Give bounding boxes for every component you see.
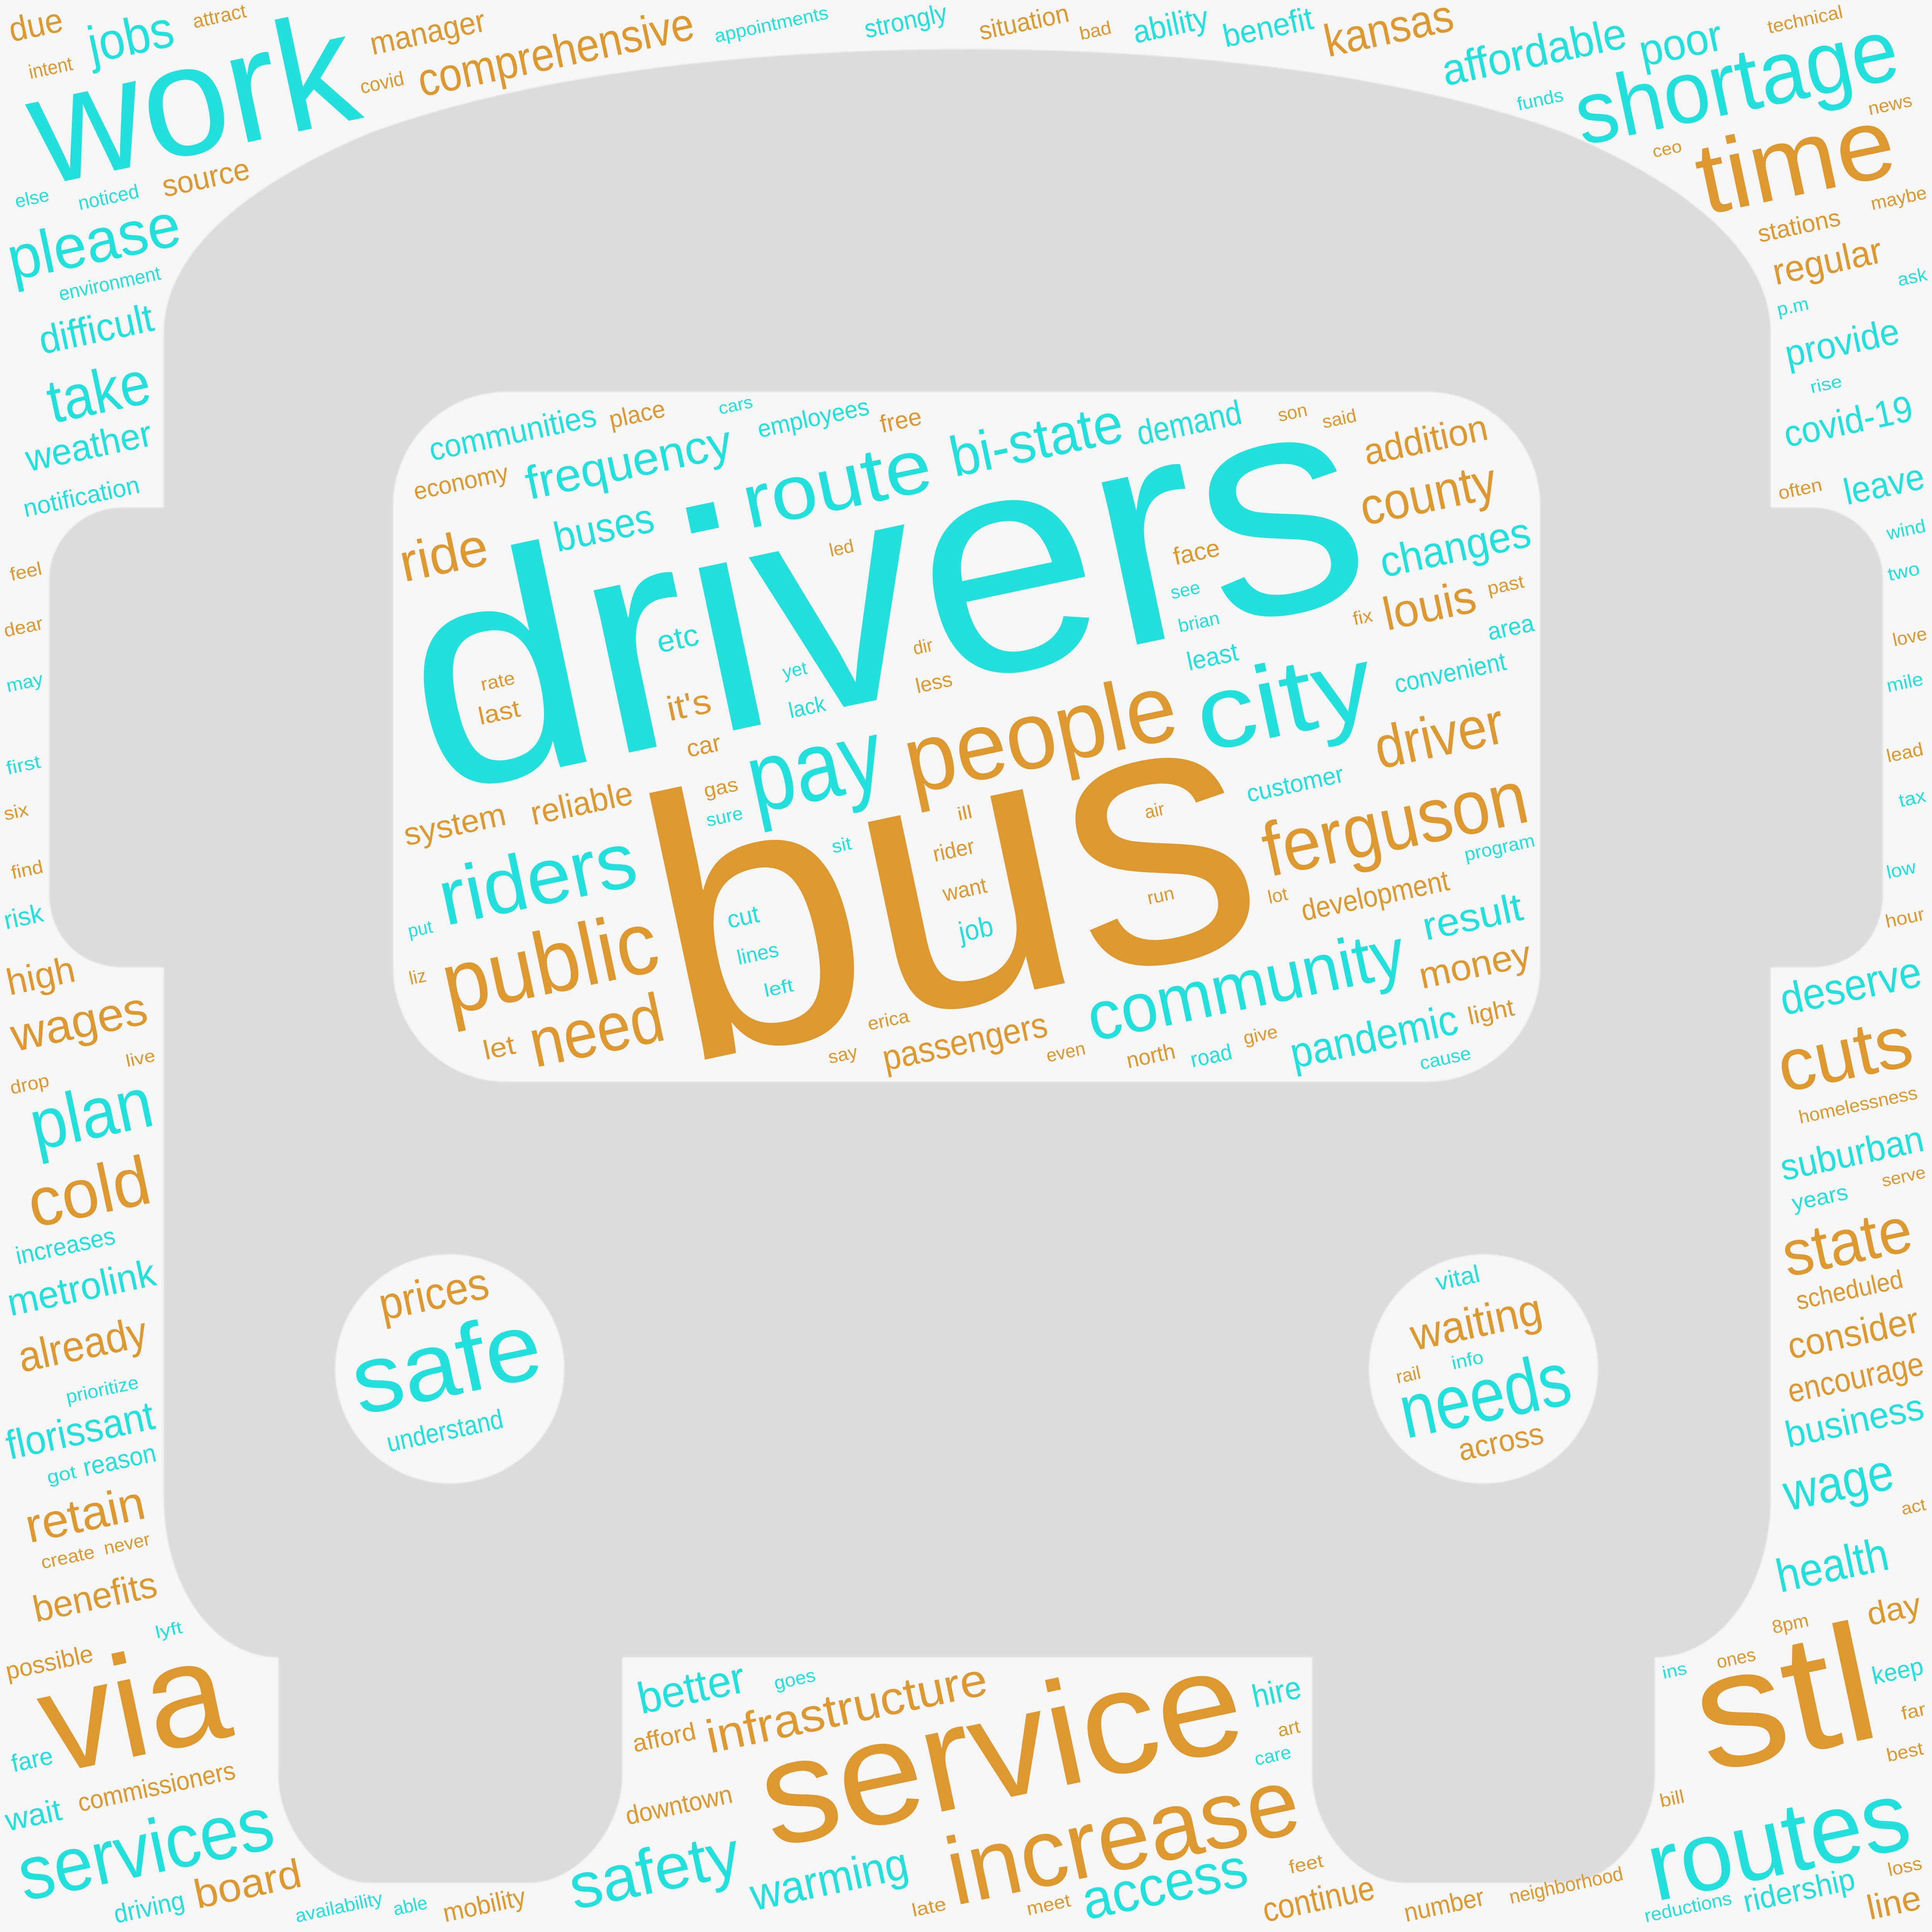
word cloud: outer words: afford: [630, 1717, 698, 1758]
word cloud: outer words: else: [13, 185, 51, 212]
word cloud: outer words: day: [1864, 1586, 1924, 1633]
word cloud: window words: north: [1124, 1039, 1177, 1073]
word cloud: window words: even: [1044, 1038, 1087, 1066]
word cloud: outer words: got: [45, 1462, 78, 1488]
word cloud: window words: demand: [1133, 393, 1245, 452]
word cloud: outer words: able: [391, 1893, 429, 1920]
word cloud: window words: said: [1320, 405, 1358, 432]
word cloud: outer words: commissioners: [75, 1756, 238, 1817]
word cloud: outer words: source: [159, 151, 253, 204]
word cloud: outer words: regular: [1769, 230, 1886, 293]
word cloud: outer words: weather: [21, 413, 156, 480]
word cloud: window words: louis: [1378, 570, 1481, 640]
word cloud: left headlight words: understand: [384, 1403, 506, 1458]
word cloud: outer words: keep: [1869, 1652, 1926, 1690]
word cloud: outer words: driving: [111, 1886, 187, 1929]
word cloud: window words: place: [606, 395, 668, 434]
word cloud: outer words: feet: [1287, 1850, 1325, 1878]
word cloud: outer words: first: [4, 752, 43, 779]
word cloud: window words: face: [1171, 534, 1222, 570]
word cloud: window words: sit: [830, 833, 853, 857]
word cloud: outer words: late: [910, 1894, 948, 1921]
word cloud: outer words: infrastructure: [701, 1652, 992, 1763]
word cloud: window words: say: [826, 1042, 859, 1068]
word cloud: outer words: florissant: [2, 1393, 158, 1468]
word cloud: outer words: often: [1776, 474, 1824, 504]
word cloud: window words: lack: [786, 691, 828, 723]
word cloud: left headlight words: prices: [374, 1257, 493, 1330]
word cloud: outer words: stations: [1755, 203, 1843, 248]
word cloud: outer words: retain: [20, 1476, 150, 1553]
word cloud: window words: last: [476, 694, 522, 730]
word cloud: window words: ill: [956, 802, 974, 825]
word cloud: right headlight words: needs: [1391, 1335, 1578, 1454]
word cloud: outer words: availability: [293, 1888, 384, 1927]
word cloud: outer words: never: [102, 1529, 152, 1559]
word cloud: outer words: warming: [745, 1837, 913, 1921]
word cloud: outer words: take: [41, 347, 156, 436]
word cloud: window words: cause: [1418, 1043, 1473, 1074]
word cloud: outer words: consider: [1784, 1299, 1922, 1367]
word: people: people: [894, 652, 1186, 815]
word cloud: window words: air: [1143, 799, 1166, 823]
word cloud: window words: program: [1463, 830, 1537, 865]
word cloud: outer words: create: [39, 1542, 97, 1573]
word cloud: outer words: love: [1891, 623, 1929, 651]
word cloud: outer words: 8pm: [1770, 1610, 1811, 1638]
word cloud: window words: lot: [1266, 884, 1289, 908]
word cloud: left headlight words: safe: [342, 1290, 551, 1435]
word cloud: window words: it's: [663, 681, 714, 728]
word cloud: outer words: loss: [1886, 1853, 1924, 1880]
word cloud: window words: convenient: [1392, 647, 1509, 699]
word: increase: increase: [937, 1746, 1308, 1925]
word cloud: window words: want: [940, 873, 989, 906]
word cloud: window words: gas: [702, 773, 740, 802]
word: drivers: drivers: [373, 316, 1392, 860]
word cloud: outer words: continue: [1259, 1868, 1378, 1929]
word cloud: outer words: due: [5, 0, 66, 49]
word cloud: outer words: benefit: [1219, 0, 1316, 54]
word cloud: outer words: bill: [1658, 1786, 1686, 1811]
word cloud: window words: dir: [911, 635, 935, 659]
word cloud: right headlight words: vital: [1433, 1260, 1482, 1296]
word cloud: window words: money: [1415, 933, 1535, 997]
word cloud: window words: reliable: [527, 774, 636, 832]
word cloud: window words: rider: [930, 834, 977, 867]
word: bus: bus: [611, 607, 1289, 1143]
word cloud: outer words: feel: [8, 558, 44, 585]
word cloud: outer words: board: [190, 1850, 305, 1917]
word cloud: window words: run: [1145, 883, 1176, 908]
word cloud: outer words: ins: [1660, 1659, 1689, 1683]
word cloud: window words: pandemic: [1286, 995, 1462, 1078]
word cloud: outer words: suburban: [1777, 1118, 1927, 1189]
word cloud: left headlight words: [342, 1257, 551, 1458]
word cloud: outer words: plan: [23, 1062, 160, 1166]
word cloud: window words: son: [1276, 400, 1309, 426]
word cloud: window words: car: [684, 728, 723, 763]
word cloud: outer words: please: [1, 190, 186, 293]
word cloud: window words: passengers: [879, 1004, 1051, 1078]
word cloud: window words: bi-state: [944, 391, 1128, 489]
word cloud: outer words: ask: [1896, 264, 1929, 290]
word cloud: window words: communities: [426, 397, 599, 468]
word cloud: outer words: benefits: [29, 1564, 161, 1630]
word: pay: pay: [737, 698, 892, 834]
word cloud: outer words: appointments: [713, 3, 830, 47]
word cloud: window words: result: [1418, 885, 1526, 949]
word: public: public: [432, 891, 667, 1034]
word cloud: outer words: health: [1771, 1527, 1893, 1602]
word cloud: outer words: affordable: [1437, 8, 1631, 95]
word cloud: outer words: art: [1276, 1716, 1302, 1741]
word cloud: outer words: intent: [27, 53, 75, 83]
word: via: via: [25, 1606, 243, 1804]
word cloud: outer words: reason: [80, 1438, 159, 1482]
word cloud: outer words: live: [124, 1046, 157, 1071]
word cloud: outer words: provide: [1781, 310, 1903, 375]
word cloud: outer words: ones: [1715, 1645, 1757, 1673]
word cloud: outer words: best: [1885, 1738, 1925, 1766]
word cloud: window words: addition: [1360, 406, 1492, 473]
word cloud: window words: need: [522, 978, 671, 1082]
word cloud: window words: sure: [704, 803, 745, 831]
word cloud: outer words: low: [1884, 857, 1918, 883]
word cloud: window words: light: [1465, 993, 1517, 1030]
word cloud: outer words: cold: [20, 1141, 157, 1242]
word cloud: outer words: risk: [1, 898, 46, 935]
word cloud: outer words: ceo: [1651, 137, 1684, 162]
word cloud: outer words: far: [1899, 1699, 1928, 1724]
word: riders: riders: [430, 815, 644, 942]
word: service: service: [744, 1616, 1257, 1879]
word cloud: outer words: six: [2, 799, 30, 825]
word cloud: outer words: neighborhood: [1507, 1862, 1625, 1908]
word cloud: outer words: goes: [772, 1665, 817, 1694]
word cloud: outer words: years: [1789, 1180, 1850, 1216]
word cloud: outer words: possible: [3, 1639, 95, 1685]
word cloud: outer words: lyft: [153, 1618, 184, 1642]
word cloud: window words: lines: [735, 938, 781, 969]
word cloud: outer words: homelessness: [1797, 1083, 1919, 1128]
word cloud: outer words: funds: [1515, 85, 1565, 115]
word: route: route: [734, 422, 939, 544]
word cloud: window words: let: [480, 1029, 518, 1066]
word cloud: right headlight words: waiting: [1405, 1284, 1546, 1360]
word cloud: outer words: number: [1401, 1882, 1487, 1927]
word cloud: outer words: better: [633, 1653, 749, 1723]
word cloud: window words: see: [1169, 577, 1202, 603]
word cloud: window words: past: [1485, 571, 1526, 599]
word cloud: window words: erica: [866, 1006, 911, 1034]
word cloud: outer words: scheduled: [1793, 1265, 1905, 1315]
word cloud: outer words: technical: [1765, 2, 1845, 37]
word cloud: outer words: ridership: [1740, 1862, 1858, 1919]
word cloud: outer words: increases: [13, 1221, 117, 1270]
word cloud: outer words: environment: [57, 262, 163, 305]
word: ferguson: ferguson: [1255, 753, 1535, 893]
word cloud: window words: changes: [1376, 508, 1535, 587]
word cloud: outer words: tax: [1897, 786, 1928, 811]
word cloud: window words: free: [877, 402, 924, 438]
word cloud: window words: road: [1188, 1039, 1234, 1072]
word cloud: outer words: find: [9, 857, 45, 883]
word cloud: outer words: attract: [190, 0, 248, 32]
word cloud: outer words: wages: [5, 981, 152, 1061]
word cloud: window words: buses: [549, 494, 658, 561]
word cloud: window words: cut: [724, 900, 762, 934]
word cloud: outer words: reductions: [1643, 1888, 1733, 1927]
word cloud: outer words: noticed: [76, 180, 141, 214]
word cloud: outer words: access: [1076, 1836, 1253, 1932]
bus headlight left: [335, 1254, 564, 1483]
word cloud: outer words: dear: [2, 613, 45, 641]
word cloud: window words: least: [1184, 637, 1241, 676]
word cloud: right headlight words: info: [1450, 1347, 1485, 1374]
word cloud: window words: give: [1242, 1021, 1279, 1049]
word cloud: outer words: jobs: [81, 0, 179, 74]
word cloud: outer words: cuts: [1770, 999, 1919, 1108]
word cloud: outer words: hour: [1883, 904, 1926, 932]
word cloud: window words: left: [762, 975, 795, 1001]
word cloud: outer words: mobility: [440, 1882, 529, 1928]
word cloud: outer words: lead: [1885, 739, 1925, 767]
word: stl: stl: [1676, 1588, 1892, 1808]
word cloud: outer words: mile: [1885, 669, 1925, 696]
word cloud: window words: brian: [1176, 608, 1221, 637]
word: time: time: [1686, 84, 1905, 236]
word cloud: window words: yet: [781, 658, 809, 683]
word cloud: window words: customer: [1244, 760, 1346, 808]
word cloud: window words: [373, 316, 1537, 1143]
bus headlight right: [1369, 1254, 1598, 1483]
word cloud: outer words: wait: [2, 1792, 65, 1838]
word cloud: outer words: downtown: [623, 1780, 735, 1830]
word cloud: outer words: wage: [1778, 1442, 1899, 1522]
word: routes: routes: [1637, 1759, 1919, 1922]
word cloud: outer words: metrolink: [3, 1251, 160, 1324]
word cloud: outer words: may: [4, 669, 45, 696]
word cloud: window words: frequency: [520, 415, 736, 510]
word cloud: window words: driver: [1368, 690, 1510, 781]
word cloud: outer words: prioritize: [64, 1372, 141, 1408]
word cloud: outer words: maybe: [1869, 182, 1929, 214]
word cloud: right headlight words: across: [1455, 1416, 1546, 1468]
word cloud: outer words: high: [3, 949, 79, 1003]
word cloud: outer words: poor: [1634, 10, 1727, 76]
word cloud: window words: system: [400, 796, 509, 853]
word cloud: outer words: drop: [8, 1070, 51, 1099]
word cloud: outer words: difficult: [35, 295, 157, 362]
word cloud: outer words: two: [1886, 558, 1922, 585]
word cloud: outer words: state: [1776, 1194, 1918, 1291]
word cloud: right headlight words: [1391, 1260, 1578, 1468]
word cloud: window words: led: [827, 536, 856, 561]
word cloud: outer words: act: [1900, 1495, 1928, 1519]
word cloud: outer words: news: [1866, 90, 1914, 119]
word cloud: outer words: fare: [9, 1742, 55, 1777]
word cloud: right headlight words: rail: [1394, 1362, 1422, 1388]
word cloud: window words: put: [406, 917, 434, 942]
word cloud: outer words: manager: [367, 2, 488, 62]
word cloud: outer words: meet: [1025, 1890, 1072, 1920]
word cloud: outer words: covid-19: [1780, 388, 1917, 455]
word: city: city: [1184, 624, 1383, 774]
word cloud: window words: etc: [654, 617, 702, 660]
word cloud: window words: job: [955, 910, 996, 948]
word cloud: window words: cars: [717, 393, 754, 418]
word cloud: window words: county: [1355, 452, 1502, 537]
word cloud: outer words: safety: [563, 1818, 746, 1923]
word cloud: outer words: already: [14, 1307, 151, 1381]
word: services: services: [10, 1779, 281, 1917]
word cloud: outer words: rise: [1808, 372, 1844, 397]
word cloud: window words: employees: [755, 392, 872, 443]
bus window: [393, 392, 1540, 1082]
word cloud: window words: economy: [411, 458, 511, 505]
word cloud: outer words: serve: [1880, 1163, 1927, 1190]
word cloud: window words: fix: [1351, 605, 1374, 629]
word cloud: window words: rate: [479, 668, 517, 695]
word cloud: window words: development: [1298, 864, 1452, 927]
word cloud: outer words: bad: [1078, 17, 1113, 44]
word cloud: window words: area: [1485, 609, 1537, 646]
word cloud: window words: ride: [394, 515, 493, 594]
word cloud: outer words: hire: [1249, 1669, 1304, 1714]
word cloud: outer words: notification: [20, 471, 142, 522]
word cloud: outer words: business: [1781, 1386, 1927, 1456]
word cloud: window words: less: [913, 667, 954, 698]
word: shortage: shortage: [1565, 0, 1907, 164]
word: community: community: [1080, 913, 1412, 1056]
word cloud: outer words: covid: [358, 67, 406, 98]
word cloud: window words: liz: [407, 965, 428, 989]
word cloud: outer words: line: [1863, 1878, 1924, 1927]
word cloud: outer words: wind: [1884, 516, 1927, 544]
word cloud: outer words: p.m: [1775, 293, 1811, 320]
word cloud: outer words: care: [1253, 1742, 1293, 1770]
